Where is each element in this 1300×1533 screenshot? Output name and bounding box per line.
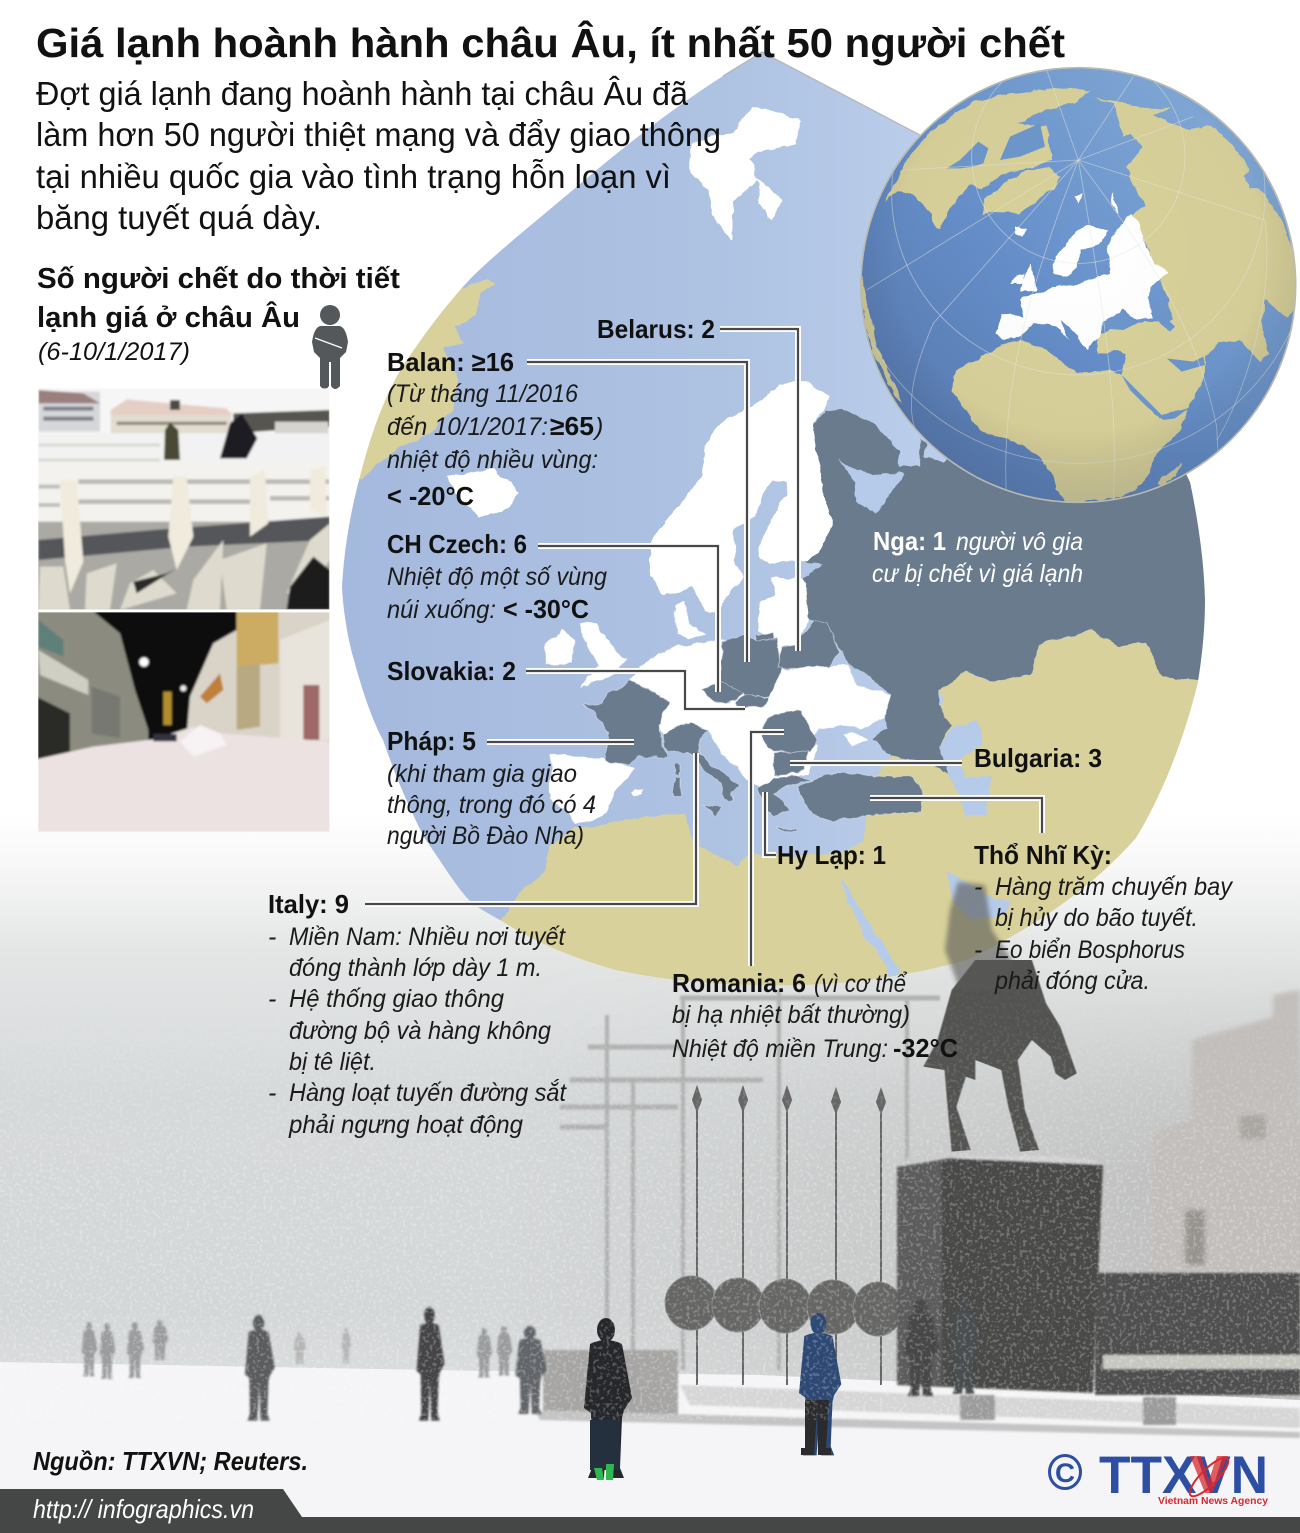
label: Italy: phải ngưng hoạt động — [288, 1111, 523, 1139]
intro text: băng tuyết quá dày. — [36, 199, 322, 236]
white land: Denmark, UK, Ireland, Crimea, Spain — [544, 602, 869, 823]
callout: Balan line — [527, 362, 747, 662]
statue rider over the map — [945, 882, 1012, 990]
label: Nga: người vô gia — [956, 528, 1083, 556]
label: Italy: Italy: 9 — [268, 889, 349, 919]
globe graticule — [866, 70, 1290, 499]
label: Thổ Nhĩ Kỳ: bị hủy do bão tuyết. — [995, 904, 1198, 932]
chart heading: Số người chết do thời tiết — [37, 263, 400, 295]
title: Giá lạnh hoành hành châu Âu, ít nhất 50 người chết — [36, 20, 1065, 66]
white land: central and eastern Europe — [630, 640, 891, 790]
label: CH Czech: núi xuống: — [387, 596, 496, 624]
shields — [665, 1276, 903, 1336]
inland seas: White Sea, Caspian, Red Sea, Gulf — [839, 458, 1012, 920]
land: Greenland coast — [359, 279, 496, 480]
logo: TTXVN: TTXVN — [1099, 1446, 1268, 1505]
Red Sea — [840, 877, 901, 978]
label: Balan: nhiệt độ nhiều vùng: — [387, 446, 598, 474]
label: Balan: (Từ tháng 11/2016 — [387, 380, 578, 408]
lamp poles — [560, 990, 940, 1370]
central Europe map group — [544, 602, 922, 978]
label: Balan: đến 10/1/2017: — [387, 413, 548, 441]
globe inset — [860, 66, 1296, 504]
callout: Thổ Nhĩ Kỳ line — [870, 798, 1042, 833]
label: Pháp: (khi tham gia giao — [387, 760, 577, 788]
label: Thổ Nhĩ Kỳ: Thổ Nhĩ Kỳ: — [974, 840, 1112, 870]
label: Nga: Nga: 1 — [873, 526, 946, 556]
map: teardrop map of Europe — [342, 52, 1205, 986]
ground snow — [0, 1362, 1300, 1533]
label: Pháp — [387, 726, 596, 850]
label: Balan: Balan: ≥16 — [387, 347, 514, 377]
label: CH Czech: < -30°C — [503, 594, 589, 624]
label: Italy: Hàng loạt tuyến đường sắt — [289, 1078, 567, 1107]
label: Romania: (vì cơ thể — [814, 970, 907, 998]
label: Italy: Hệ thống giao thông — [289, 985, 504, 1013]
label: Balan: ) — [592, 413, 603, 441]
label: Italy: bị tê liệt. — [289, 1048, 376, 1076]
falling snow texture — [0, 1013, 1300, 1420]
label: Balan: ≥65 — [550, 411, 594, 441]
land: Africa, Middle East and Central Asia — [500, 630, 1198, 986]
callout: Pháp line — [487, 739, 634, 745]
source note: Nguồn: TTXVN; Reuters. — [33, 1446, 308, 1476]
photo: frozen pier railing — [33, 383, 333, 613]
chart heading — [37, 263, 400, 366]
label: CH Czech: Nhiệt độ một số vùng — [387, 563, 607, 591]
label: Nga: cư bị chết vì giá lạnh — [872, 560, 1083, 588]
label: Pháp: thông, trong đó có 4 — [387, 791, 596, 819]
intro text — [36, 75, 721, 236]
callout: Slovakia line — [526, 671, 745, 709]
label: Romania: -32°C — [893, 1033, 958, 1063]
intro text: làm hơn 50 người thiệt mạng và đẩy giao thông — [36, 116, 721, 153]
label: Thổ Nhĩ Kỳ — [974, 840, 1233, 995]
icon: person — [312, 305, 348, 389]
label: Italy — [268, 889, 567, 1139]
label: Italy: - — [268, 985, 276, 1013]
label: CH Czech — [387, 529, 607, 624]
label: Thổ Nhĩ Kỳ: - — [974, 873, 982, 901]
low dark wall — [1095, 1273, 1300, 1395]
label: Romania: bị hạ nhiệt bất thường) — [672, 1001, 910, 1029]
white land: Scandinavia and Baltic — [649, 380, 834, 647]
label: Romania: Nhiệt độ miền Trung: — [672, 1035, 888, 1063]
stone box and steps — [535, 1350, 1300, 1438]
label: Romania: Romania: 6 — [672, 968, 806, 998]
statue pedestal — [897, 1156, 1103, 1393]
label: Hy Lạp: Hy Lạp: 1 — [777, 840, 886, 870]
label: Italy: đóng thành lớp dày 1 m. — [289, 954, 542, 982]
background photo: snowy square — [0, 815, 1300, 1533]
main figures — [584, 1313, 841, 1480]
intro text: Đợt giá lạnh đang hoành hành tại châu Âu đã — [36, 75, 689, 112]
label: Bulgaria: Bulgaria: 3 — [974, 743, 1102, 773]
callout: Belarus line — [720, 329, 798, 651]
globe seas: Hudson Bay, Red Sea, Gulf, Black Sea, Caspian — [947, 123, 1205, 420]
countries with deaths: France, Italy, Poland, Belarus, Czech, Slovakia, Romania, Bulgaria, Greece, Turkey — [583, 620, 922, 831]
country: Russia — [802, 408, 1205, 774]
logo: TTXVN: C — [1055, 1458, 1075, 1488]
label: Balan — [387, 347, 603, 511]
label: Belarus: Belarus: 2 — [597, 314, 715, 344]
label: Slovakia: Slovakia: 2 — [387, 656, 516, 686]
intro text: tại nhiều quốc gia vào tình trạng hỗn loạn vì — [36, 158, 671, 195]
footer bar with URL tab: http:// infographics.vn — [33, 1494, 254, 1524]
land: Svalbard and Iceland — [448, 107, 801, 517]
teardrop outline — [723, 52, 920, 135]
label: Thổ Nhĩ Kỳ: - — [974, 936, 982, 964]
label: Romania — [672, 968, 958, 1063]
callout: Romania line — [751, 732, 784, 966]
callout: CH Czech line — [538, 546, 718, 692]
chart heading: lạnh giá ở châu Âu — [37, 300, 300, 334]
callout: Italy line — [365, 753, 696, 904]
spears — [693, 1088, 885, 1385]
label: Italy: - — [268, 923, 276, 951]
callout: Hy Lạp line — [765, 792, 776, 855]
label: Italy: đường bộ và hàng không — [289, 1017, 551, 1045]
chart heading: (6-10/1/2017) — [38, 338, 190, 366]
building at right — [1154, 990, 1300, 1280]
distant people — [82, 1320, 512, 1379]
label: Thổ Nhĩ Kỳ: phải đóng cửa. — [994, 967, 1150, 995]
label: Thổ Nhĩ Kỳ: Eo biển Bosphorus — [995, 936, 1185, 964]
label: Balan: < -20°C — [387, 481, 474, 511]
label: CH Czech: CH Czech: 6 — [387, 529, 527, 559]
mid-ground people — [245, 1298, 980, 1421]
label: Pháp: Pháp: 5 — [387, 726, 476, 756]
globe land: beige continents — [860, 88, 1300, 503]
statue horse — [923, 960, 1077, 1152]
label: Italy: Miền Nam: Nhiều nơi tuyết — [289, 923, 566, 951]
label: Thổ Nhĩ Kỳ: Hàng trăm chuyến bay — [995, 873, 1233, 901]
label: Italy: - — [268, 1079, 276, 1107]
callout: Bulgaria line — [790, 760, 962, 766]
logo: TTXVN: Vietnam News Agency — [1158, 1495, 1268, 1507]
photo: snowed-in street at night — [33, 610, 333, 833]
footer bar with URL tab — [0, 1489, 1300, 1533]
label: Pháp: người Bồ Đào Nha) — [387, 822, 584, 850]
globe land: white Europe — [995, 192, 1168, 350]
label: Nga — [872, 526, 1083, 588]
